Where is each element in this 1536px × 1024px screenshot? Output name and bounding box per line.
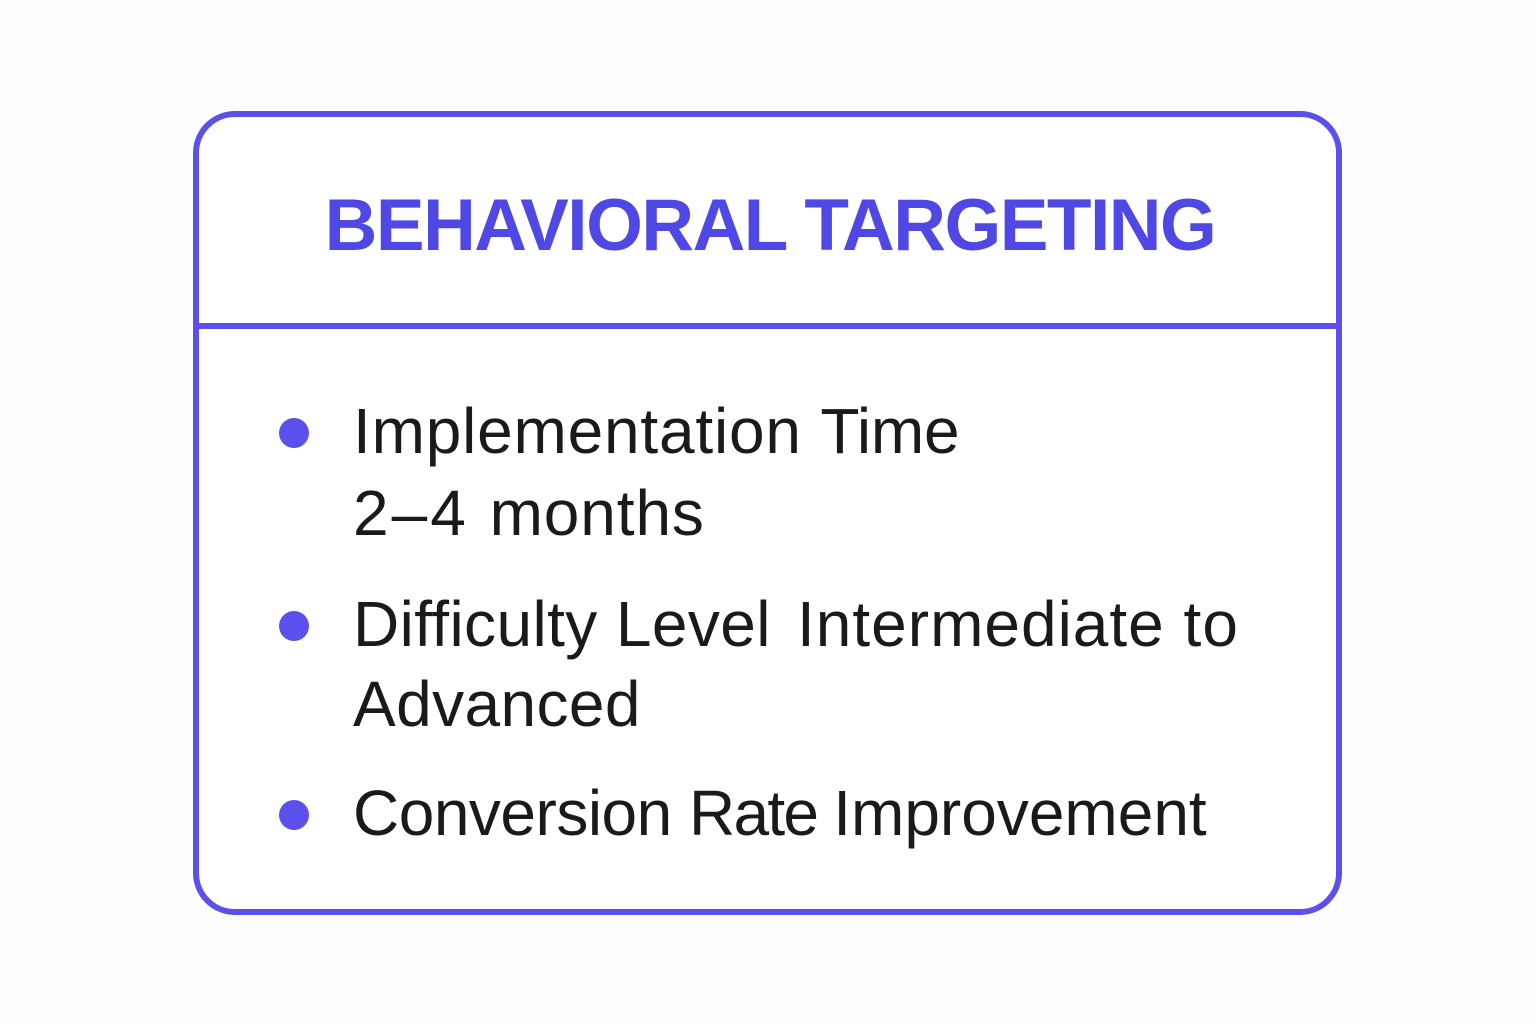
header divider xyxy=(196,323,1339,329)
text: 2-4 months: 2–4 months xyxy=(353,477,705,549)
text: advanced: Advanced xyxy=(353,668,641,740)
title: BEHAVIORAL TARGETING xyxy=(325,185,1215,266)
text: difficulty level: Difficulty Level xyxy=(353,588,771,660)
text: conversion rate improvement: Conversion Rate Improvement xyxy=(353,777,1207,849)
panel: behavioral targeting card xyxy=(193,111,1342,915)
bullet icon: implementation time xyxy=(279,418,309,448)
text: intermediate to: Intermediate to xyxy=(797,588,1239,660)
bullet icon: conversion rate xyxy=(279,800,309,830)
text: implementation time: Implementation Time xyxy=(353,395,959,467)
bullet icon: difficulty level xyxy=(279,611,309,641)
